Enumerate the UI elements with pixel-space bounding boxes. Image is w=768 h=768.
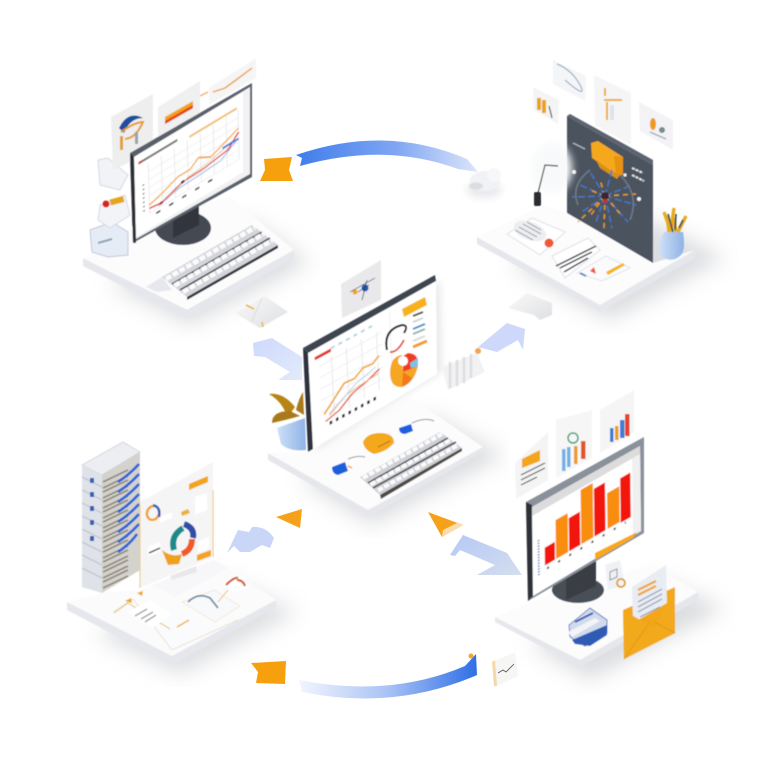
icon: open book [235,296,288,328]
panel: centre workstation [268,260,505,525]
legend rows [413,312,427,347]
orange band [595,532,637,560]
icon: potted plant [269,392,306,450]
network burst [572,170,641,228]
icon: right orange arrowhead [428,512,463,537]
arrow: centre to bottom-right [450,535,522,575]
panel: bottom-left workstation [67,442,298,675]
gauge [386,325,406,352]
line chart [138,102,239,223]
icon: small chart card [468,652,518,686]
icon: orange puck [363,433,394,454]
icon: white coil [442,348,485,390]
floating card [341,260,381,318]
document cards on platform [113,575,248,650]
icon: top orange ribbon [260,157,293,181]
icon: blue box stack [568,608,607,646]
arrow: bottom-left to centre [227,527,274,553]
donut large [173,524,193,554]
label chip [402,297,427,317]
floating cards [515,390,634,499]
icon: glass containers [90,158,130,257]
monitor [303,275,442,452]
icon: small device [605,560,625,590]
icon: blue mouse left [332,456,365,475]
icon: pen holder [659,208,686,260]
small screen on stand [170,566,197,580]
monitor [526,437,644,603]
icon: bottom orange ribbon [251,661,286,684]
arrow: centre to upper-right [478,323,525,352]
documents on desk [507,217,630,281]
chart cards floating [111,58,256,170]
arrow: upper-left to centre [253,338,302,380]
dark panel [567,114,653,263]
panel: top-left workstation [83,58,310,328]
keyboard [360,432,462,499]
arrow: bottom arc [299,654,477,698]
platform [67,560,276,665]
server rack [82,442,140,593]
bar chart [538,461,631,576]
monitor [130,83,252,245]
dashboard panel [140,462,213,588]
platform [495,565,698,667]
platform [83,197,294,319]
panel: bottom-right workstation [495,390,725,680]
icon: curled paper [508,293,552,320]
donut small [145,504,161,522]
stand slab [153,560,228,597]
icon: desk lamp [532,142,572,206]
platform [477,205,695,312]
icon: blue mouse right [399,419,434,434]
orange box [591,141,623,179]
icon: envelope with letter [623,565,675,659]
panel: top-right workstation [466,60,725,320]
donut chart [390,353,418,387]
platform [268,397,483,517]
icon: cloud [466,168,502,198]
arrow: top arc [296,140,478,172]
line chart [315,321,385,429]
icon: left orange arrowhead [276,509,302,528]
keyboard [146,225,278,300]
floating cards [533,60,673,150]
